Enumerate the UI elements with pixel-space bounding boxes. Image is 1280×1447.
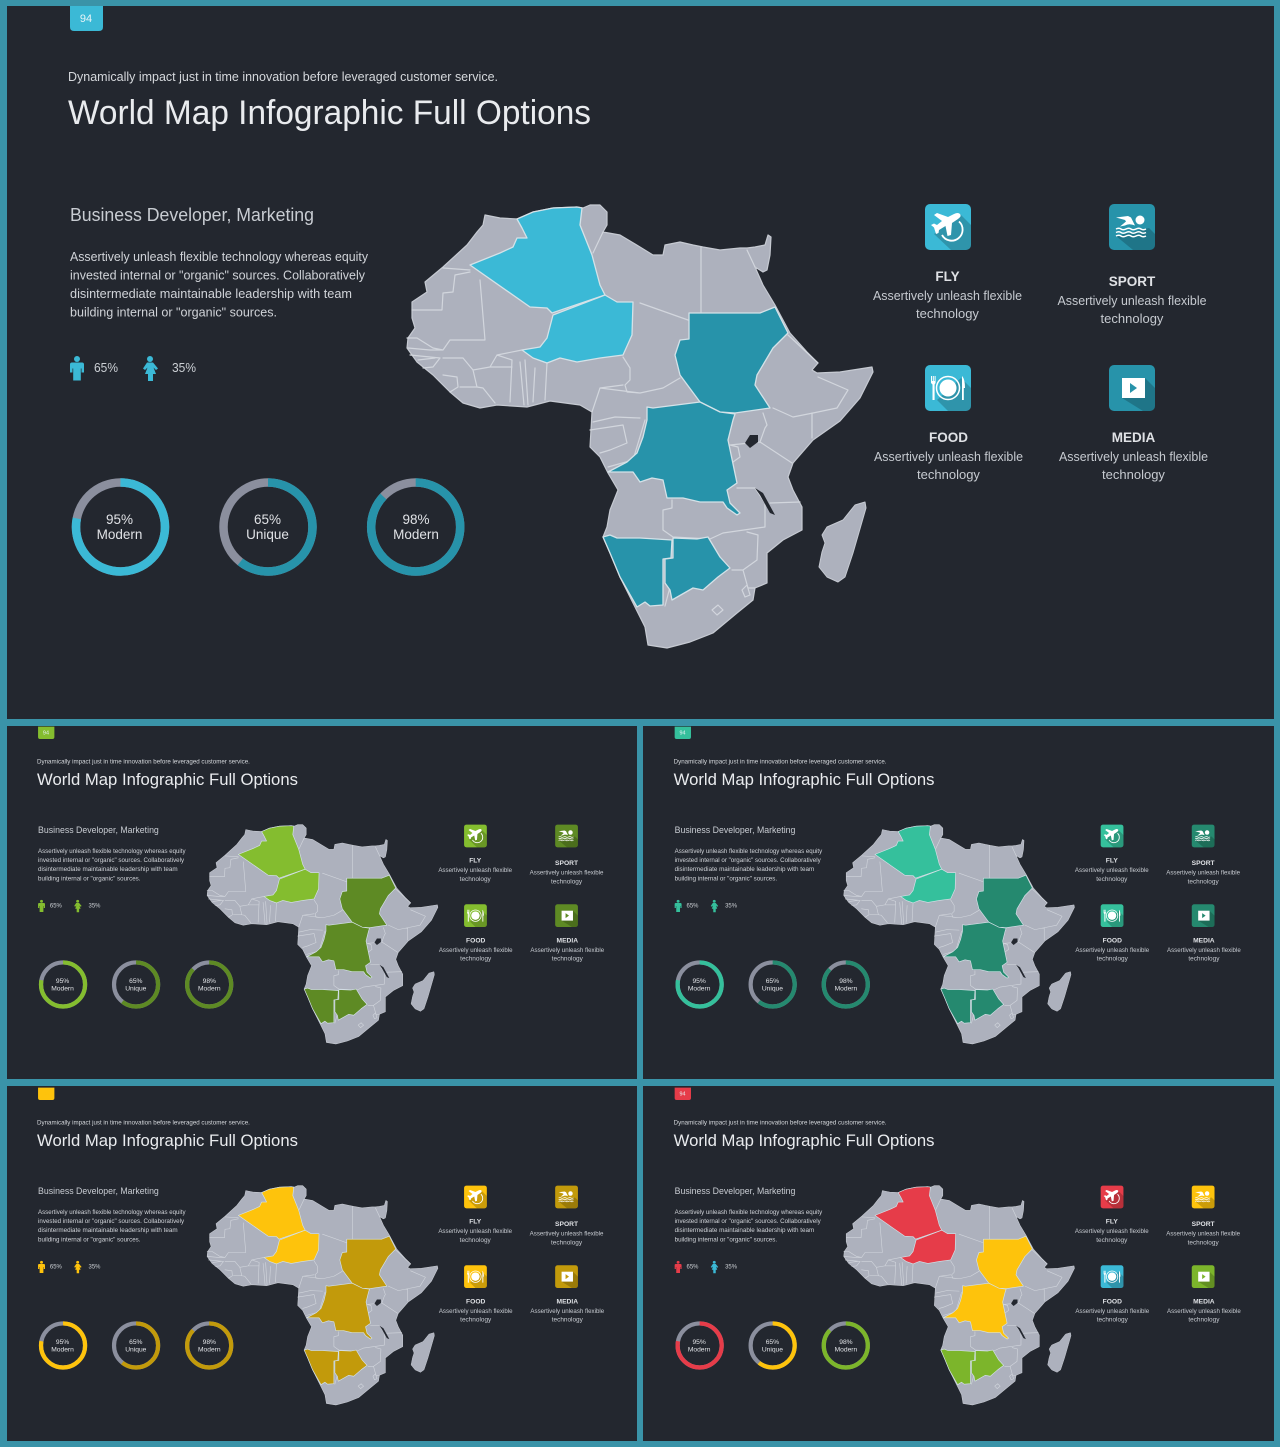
- item: media: technology: [552, 1317, 584, 1324]
- donut 95%: [41, 1323, 85, 1367]
- donut 95%: [76, 482, 165, 572]
- body text: building internal or "organic" sources.: [675, 875, 777, 882]
- body text: invested internal or "organic" sources. Collaboratively: [675, 857, 821, 864]
- item: media: MEDIA: [1112, 430, 1156, 445]
- map: Africa green: [207, 825, 438, 1044]
- subtitle: Dynamically impact just in time innovation before leveraged customer service.: [68, 69, 498, 84]
- body text: building internal or "organic" sources.: [70, 304, 277, 320]
- donut 95%: 95%: [56, 1339, 69, 1346]
- donut 65%: Unique: [125, 1346, 147, 1353]
- item: sport: [1058, 204, 1206, 326]
- male stat: 65%: [94, 360, 118, 375]
- item: fly: Assertively unleash flexible: [438, 867, 512, 874]
- item: food: [1075, 904, 1150, 963]
- donut 95%: 95%: [692, 1339, 706, 1346]
- title: World Map Infographic Full Options: [674, 1131, 935, 1150]
- donut 95%: Modern: [688, 985, 711, 992]
- body text: disintermediate maintainable leadership with team: [38, 1227, 178, 1234]
- body text: [70, 249, 368, 320]
- male stat: [38, 1261, 62, 1273]
- item: media: MEDIA: [557, 937, 578, 944]
- icon grid: yellow: [438, 1186, 605, 1324]
- badge: [70, 6, 103, 31]
- subtitle: Dynamically impact just in time innovation before leveraged customer service.: [674, 759, 887, 766]
- item: sport: SPORT: [555, 1221, 578, 1228]
- body text: invested internal or "organic" sources. Collaboratively: [675, 1218, 821, 1225]
- female stat: 35%: [725, 903, 737, 910]
- item: fly: Assertively unleash flexible: [873, 288, 1022, 303]
- map: Africa multicolour: [844, 1186, 1074, 1405]
- donut 98%: Modern: [835, 985, 858, 992]
- title: World Map Infographic Full Options: [674, 770, 935, 789]
- badge: 94: [43, 1091, 49, 1097]
- item: food: [439, 904, 513, 963]
- body text: disintermediate maintainable leadership with team: [675, 1227, 814, 1234]
- item: food: technology: [917, 467, 980, 482]
- title: World Map Infographic Full Options: [68, 94, 591, 132]
- panel: teal slide: [643, 726, 1274, 1079]
- item: fly: [1075, 825, 1149, 883]
- item: sport: Assertively unleash flexible: [1058, 293, 1206, 308]
- item: sport: Assertively unleash flexible: [1166, 870, 1240, 877]
- item: media: technology: [552, 956, 584, 963]
- map: Africa teal: [844, 825, 1074, 1044]
- map: Africa yellow: [207, 1186, 438, 1405]
- left column: green: [37, 727, 298, 1006]
- female stat: [711, 1261, 737, 1273]
- donut 98%: [187, 1323, 231, 1367]
- donut 98%: [187, 962, 231, 1006]
- body text: building internal or "organic" sources.: [38, 1236, 141, 1243]
- donut 98%: 98%: [203, 978, 216, 985]
- male stat: [675, 900, 699, 912]
- donut 95%: Modern: [97, 527, 142, 542]
- item: food: FOOD: [929, 430, 968, 445]
- donut 95%: Modern: [688, 1346, 711, 1353]
- left column: cyan: [68, 6, 591, 572]
- subtitle: Dynamically impact just in time innovation before leveraged customer service.: [674, 1120, 887, 1127]
- donut 95%: [41, 962, 85, 1006]
- body text: [38, 848, 186, 882]
- item: food: technology: [460, 956, 492, 963]
- title: World Map Infographic Full Options: [37, 1131, 298, 1150]
- item: media: [530, 904, 605, 963]
- male stat: [70, 356, 118, 380]
- badge: 94: [680, 730, 686, 736]
- item: food: [439, 1265, 513, 1324]
- donut 95%: [678, 962, 722, 1006]
- body text: building internal or "organic" sources.: [675, 1236, 777, 1243]
- left column: teal: [674, 727, 935, 1006]
- badge: 94: [43, 730, 49, 736]
- badge: [38, 1088, 54, 1100]
- item: media: [1059, 365, 1208, 482]
- donut 98%: Modern: [198, 1346, 221, 1353]
- female stat: 35%: [89, 1264, 101, 1271]
- donut 95%: 95%: [56, 978, 69, 985]
- item: sport: SPORT: [1192, 1221, 1215, 1228]
- donut 65%: [114, 962, 158, 1006]
- female stat: 35%: [725, 1264, 737, 1271]
- item: media: technology: [1102, 467, 1165, 482]
- panel: yellow slide: [7, 1086, 637, 1441]
- item: media: MEDIA: [557, 1298, 578, 1305]
- item: sport: Assertively unleash flexible: [530, 870, 604, 877]
- item: fly: FLY: [935, 269, 960, 284]
- item: food: FOOD: [466, 937, 486, 944]
- item: fly: FLY: [469, 1219, 482, 1226]
- item: sport: SPORT: [1109, 274, 1156, 289]
- donut 95%: 95%: [106, 512, 133, 527]
- item: media: MEDIA: [1193, 1298, 1215, 1305]
- item: food: FOOD: [1103, 937, 1122, 944]
- donut 65%: Unique: [762, 985, 783, 992]
- item: media: Assertively unleash flexible: [1059, 449, 1208, 464]
- donut 65%: [751, 1323, 795, 1367]
- donut 65%: 65%: [766, 1339, 779, 1346]
- map: Africa cyan: [407, 205, 873, 648]
- donut 98%: Modern: [393, 527, 439, 542]
- item: sport: SPORT: [555, 860, 578, 867]
- body text: Assertively unleash flexible technology whereas equity: [38, 848, 186, 855]
- panel: multicolour slide: [643, 1086, 1274, 1441]
- item: food: Assertively unleash flexible: [439, 1308, 513, 1315]
- body text: invested internal or "organic" sources. Collaboratively: [38, 857, 185, 864]
- item: fly: technology: [460, 1237, 492, 1244]
- female stat: [711, 900, 737, 912]
- donut 98%: Modern: [835, 1346, 858, 1353]
- item: fly: [873, 204, 1022, 321]
- donut 65%: Unique: [762, 1346, 783, 1353]
- item: fly: [438, 825, 512, 883]
- body text: disintermediate maintainable leadership with team: [38, 866, 178, 873]
- item: food: technology: [460, 1317, 492, 1324]
- female stat: [74, 1261, 101, 1273]
- donut 65%: [751, 962, 795, 1006]
- item: sport: [1166, 825, 1240, 885]
- donut 65%: Unique: [125, 985, 147, 992]
- item: fly: Assertively unleash flexible: [1075, 867, 1149, 874]
- title: World Map Infographic Full Options: [37, 770, 298, 789]
- left column: multicolour: [674, 1088, 935, 1367]
- item: fly: [438, 1186, 512, 1244]
- item: fly: FLY: [1106, 1219, 1118, 1226]
- icon grid: green: [438, 825, 605, 963]
- item: food: Assertively unleash flexible: [1075, 1308, 1150, 1315]
- male stat: 65%: [50, 903, 62, 910]
- item: fly: Assertively unleash flexible: [438, 1228, 512, 1235]
- male stat: [38, 900, 62, 912]
- donut 98%: [824, 962, 868, 1006]
- female stat: [143, 356, 196, 381]
- item: sport: technology: [551, 1239, 583, 1246]
- item: sport: technology: [1188, 1239, 1219, 1246]
- donut 98%: 98%: [839, 1339, 853, 1346]
- item: food: technology: [1097, 1317, 1129, 1324]
- item: media: MEDIA: [1193, 937, 1215, 944]
- donut 98%: 98%: [402, 512, 430, 527]
- female stat: 35%: [172, 360, 196, 375]
- section heading: Business Developer, Marketing: [675, 825, 795, 835]
- item: sport: Assertively unleash flexible: [1166, 1231, 1240, 1238]
- badge: 94: [80, 13, 92, 25]
- item: fly: Assertively unleash flexible: [1075, 1228, 1149, 1235]
- male stat: [675, 1261, 699, 1273]
- item: fly: technology: [460, 876, 492, 883]
- item: food: FOOD: [1103, 1298, 1122, 1305]
- body text: Assertively unleash flexible technology whereas equity: [675, 848, 823, 855]
- section heading: Business Developer, Marketing: [38, 1186, 159, 1196]
- donut 65%: 65%: [766, 978, 779, 985]
- female stat: 35%: [89, 903, 101, 910]
- donut 98%: 98%: [203, 1339, 216, 1346]
- item: fly: technology: [1096, 876, 1128, 883]
- donut 95%: 95%: [692, 978, 706, 985]
- donut 65%: 65%: [129, 978, 143, 985]
- item: fly: [1075, 1186, 1149, 1244]
- icon grid: teal: [1075, 825, 1241, 963]
- subtitle: Dynamically impact just in time innovation before leveraged customer service.: [37, 1120, 250, 1127]
- body text: invested internal or "organic" sources. Collaboratively: [38, 1218, 185, 1225]
- donut 98%: 98%: [839, 978, 853, 985]
- badge: [675, 1088, 691, 1100]
- item: media: [1167, 1265, 1241, 1324]
- donut 65%: 65%: [129, 1339, 143, 1346]
- donut 65%: [114, 1323, 158, 1367]
- male stat: 65%: [687, 1264, 699, 1271]
- donut 65%: [224, 482, 312, 572]
- item: sport: [530, 1186, 604, 1246]
- item: food: Assertively unleash flexible: [874, 449, 1023, 464]
- item: sport: technology: [1101, 311, 1164, 326]
- body text: [675, 1209, 823, 1243]
- item: sport: [1166, 1186, 1240, 1246]
- male stat: 65%: [687, 903, 699, 910]
- section heading: Business Developer, Marketing: [70, 205, 314, 225]
- donut 98%: [371, 482, 460, 572]
- item: food: Assertively unleash flexible: [1075, 947, 1150, 954]
- item: fly: FLY: [1106, 858, 1118, 865]
- item: media: Assertively unleash flexible: [530, 1308, 605, 1315]
- body text: Assertively unleash flexible technology whereas equity: [675, 1209, 823, 1216]
- item: food: technology: [1097, 956, 1129, 963]
- item: fly: technology: [916, 306, 979, 321]
- subtitle: Dynamically impact just in time innovation before leveraged customer service.: [37, 759, 250, 766]
- item: food: Assertively unleash flexible: [439, 947, 513, 954]
- item: media: technology: [1188, 1317, 1220, 1324]
- female stat: [74, 900, 101, 912]
- item: sport: [530, 825, 604, 885]
- donut 65%: Unique: [246, 527, 289, 542]
- body text: [675, 848, 823, 882]
- icon grid: multicolour: [1075, 1186, 1241, 1324]
- item: media: Assertively unleash flexible: [1167, 947, 1241, 954]
- item: sport: Assertively unleash flexible: [530, 1231, 604, 1238]
- body text: disintermediate maintainable leadership with team: [70, 286, 352, 301]
- item: fly: technology: [1096, 1237, 1128, 1244]
- item: fly: FLY: [469, 858, 482, 865]
- badge: [675, 727, 691, 739]
- section heading: Business Developer, Marketing: [675, 1186, 795, 1196]
- item: media: Assertively unleash flexible: [1167, 1308, 1241, 1315]
- item: media: [530, 1265, 605, 1324]
- item: media: technology: [1188, 956, 1220, 963]
- item: food: FOOD: [466, 1298, 486, 1305]
- item: media: [1167, 904, 1241, 963]
- body text: invested internal or "organic" sources. Collaboratively: [70, 268, 365, 282]
- panel: main cyan slide: [7, 6, 1274, 719]
- donut 98%: [824, 1323, 868, 1367]
- panel: green slide: [7, 726, 637, 1079]
- body text: [38, 1209, 186, 1243]
- body text: Assertively unleash flexible technology whereas equity: [70, 249, 368, 264]
- icon grid: cyan: [873, 204, 1208, 482]
- item: sport: SPORT: [1192, 860, 1215, 867]
- donut 95%: Modern: [51, 985, 74, 992]
- donut 65%: 65%: [254, 512, 281, 527]
- item: food: [1075, 1265, 1150, 1324]
- donut 98%: Modern: [198, 985, 221, 992]
- badge: 94: [680, 1091, 686, 1097]
- donut 95%: Modern: [51, 1346, 74, 1353]
- body text: Assertively unleash flexible technology whereas equity: [38, 1209, 186, 1216]
- item: food: [874, 365, 1023, 482]
- badge: [38, 727, 54, 739]
- male stat: 65%: [50, 1264, 62, 1271]
- section heading: Business Developer, Marketing: [38, 825, 159, 835]
- item: media: Assertively unleash flexible: [530, 947, 605, 954]
- body text: disintermediate maintainable leadership with team: [675, 866, 814, 873]
- item: sport: technology: [1188, 878, 1219, 885]
- left column: yellow: [37, 1088, 298, 1367]
- donut 95%: [678, 1323, 722, 1367]
- item: sport: technology: [551, 878, 583, 885]
- body text: building internal or "organic" sources.: [38, 875, 141, 882]
